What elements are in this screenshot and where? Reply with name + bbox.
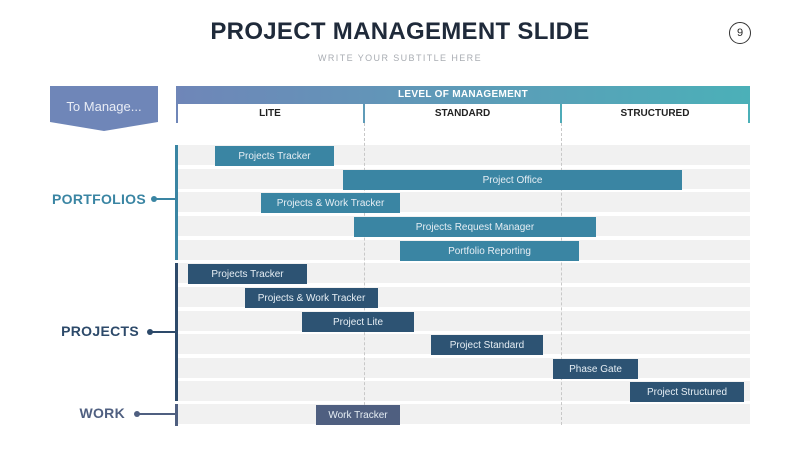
column headers xyxy=(176,104,750,123)
gantt bars: Project Standard xyxy=(450,340,524,350)
gantt bars xyxy=(188,146,744,425)
column headers: STANDARD xyxy=(435,108,490,119)
page number: 9 xyxy=(737,27,743,39)
header: level of management: LEVEL OF MANAGEMENT xyxy=(398,89,528,100)
label: projects: PROJECTS xyxy=(61,323,139,339)
label: portfolios xyxy=(52,145,178,260)
gantt bars: Project Office xyxy=(483,174,542,186)
page number xyxy=(729,22,751,44)
column headers: LITE xyxy=(259,108,281,119)
gantt bars: Projects Request Manager xyxy=(416,222,534,232)
gantt bars: Projects Tracker xyxy=(211,268,284,280)
label: portfolios: PORTFOLIOS xyxy=(52,191,146,207)
gantt bars: Portfolio Reporting xyxy=(448,246,531,256)
header: level of management xyxy=(176,86,750,104)
gantt bars: Projects Tracker xyxy=(238,150,311,162)
to manage shape xyxy=(50,86,158,131)
label: projects xyxy=(61,263,178,401)
label: work xyxy=(79,404,178,426)
gantt bars: Work Tracker xyxy=(328,410,388,420)
subtitle: WRITE YOUR SUBTITLE HERE xyxy=(318,53,482,63)
gantt bars: Projects & Work Tracker xyxy=(258,292,365,304)
title: PROJECT MANAGEMENT SLIDE xyxy=(210,18,590,45)
gantt bars: Projects & Work Tracker xyxy=(277,198,384,208)
gantt bars: Phase Gate xyxy=(569,364,622,374)
gantt bars: Project Lite xyxy=(333,316,383,328)
to manage shape: To Manage... xyxy=(66,99,142,114)
column headers: STRUCTURED xyxy=(621,108,689,119)
label: work: WORK xyxy=(79,405,125,421)
gantt bars: Project Structured xyxy=(647,386,727,398)
